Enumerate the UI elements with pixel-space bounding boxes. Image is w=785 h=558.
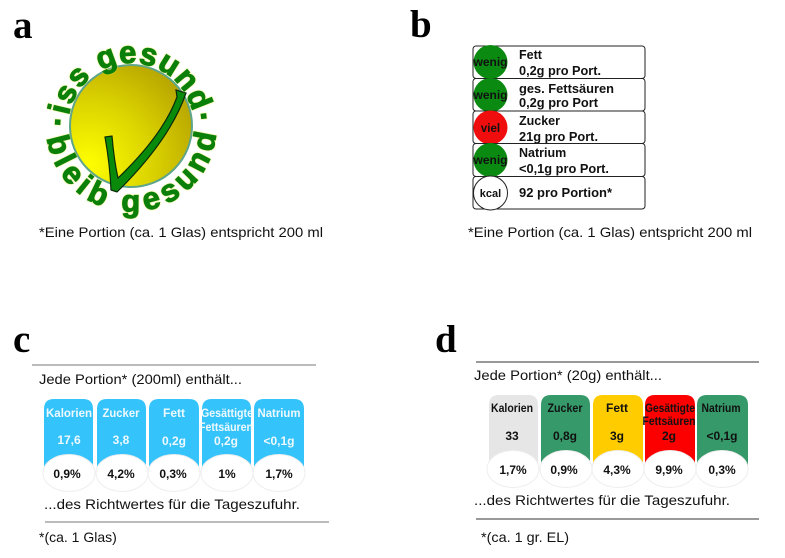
tab: Natrium: 0,3% — [708, 463, 736, 477]
tab: Natrium — [696, 395, 748, 488]
caption d: ...des Richtwertes für die Tageszufuhr. — [474, 492, 730, 508]
tab: Gesättigte Fettsäuren: Fettsäuren — [199, 420, 253, 434]
tab: Zucker: 4,2% — [107, 467, 135, 481]
tab: Gesättigte Fettsäuren — [642, 395, 696, 488]
tab: Fett — [592, 395, 644, 488]
tab: Fett: 0,3% — [159, 467, 187, 481]
panel d: colored nutrition tabs — [435, 318, 759, 545]
tab: Kalorien — [43, 399, 95, 492]
panel c: blue nutrition tabs — [13, 318, 329, 545]
tab: Fett: Fett — [606, 401, 628, 415]
icon: yellow circle — [70, 65, 192, 187]
tab: Kalorien: 17,6 — [57, 433, 81, 447]
tab: Kalorien — [487, 395, 539, 488]
row: Natrium — [472, 143, 645, 177]
panel letter a: a — [13, 4, 32, 47]
panel letter b: b — [410, 3, 432, 46]
row: kcal: kcal — [480, 188, 501, 200]
row: gesättigte Fettsäuren: ges. Fettsäuren — [519, 82, 614, 96]
row: kcal: 92 pro Portion* — [519, 186, 612, 200]
tab: Fett — [148, 399, 200, 492]
tab: Fett: 0,2g — [162, 434, 186, 448]
footnote c: *(ca. 1 Glas) — [39, 529, 117, 545]
tab: Fett: 3g — [610, 429, 624, 443]
tab: Gesättigte Fettsäuren — [199, 399, 253, 492]
row: gesättigte Fettsäuren — [472, 78, 645, 112]
tab: Natrium: Natrium — [702, 401, 740, 415]
tab: Zucker — [96, 399, 148, 492]
tab: Zucker: Zucker — [102, 406, 140, 420]
logo ring text top: ·iss gesund· — [46, 44, 214, 126]
row: Natrium: Natrium — [519, 146, 566, 160]
row: Fett: Fett — [519, 48, 543, 62]
tab: Gesättigte Fettsäuren: 9,9% — [655, 463, 683, 477]
tab: Kalorien: 0,9% — [53, 467, 81, 481]
row: Natrium: <0,1g pro Port. — [519, 162, 609, 176]
heading c: Jede Portion* (200ml) enthält... — [39, 371, 242, 387]
row: Zucker: viel — [481, 123, 500, 135]
tab: Gesättigte Fettsäuren: 2g — [662, 429, 676, 443]
tab: Kalorien: 1,7% — [499, 463, 527, 477]
row: Zucker: Zucker — [519, 114, 560, 128]
tab: Kalorien: 33 — [505, 429, 519, 443]
tab: Natrium — [253, 399, 305, 492]
tab: Zucker: 3,8 — [113, 433, 130, 447]
tab: Kalorien: Kalorien — [491, 401, 533, 415]
footnote b: *Eine Portion (ca. 1 Glas) entspricht 200 ml — [468, 224, 752, 240]
logo ring text bottom: bleib gesund — [46, 130, 218, 220]
tab: Gesättigte Fettsäuren: Fettsäuren — [642, 414, 696, 428]
row: gesättigte Fettsäuren: 0,2g pro Port — [519, 96, 599, 110]
panel letter c: c — [13, 318, 30, 361]
row: Zucker: 21g pro Port. — [519, 130, 598, 144]
row: Fett: 0,2g pro Port. — [519, 64, 601, 78]
row: gesättigte Fettsäuren: wenig — [472, 90, 508, 102]
icon: green check mark — [105, 90, 186, 192]
tab: Zucker — [540, 395, 592, 488]
row: Fett — [472, 45, 645, 79]
tab: Fett: Fett — [163, 406, 185, 420]
tab: Natrium: <0,1g — [263, 434, 295, 448]
row: Natrium: wenig — [472, 155, 508, 167]
footnote a: *Eine Portion (ca. 1 Glas) entspricht 200 ml — [39, 224, 323, 240]
tab: Zucker: 0,9% — [550, 463, 578, 477]
tab: Gesättigte Fettsäuren: Gesättigte — [645, 401, 695, 415]
tab: Natrium: <0,1g — [706, 429, 738, 443]
footnote d: *(ca. 1 gr. EL) — [481, 529, 569, 545]
tab: Kalorien: Kalorien — [46, 406, 92, 420]
tab: Fett: 4,3% — [603, 463, 631, 477]
tab: Zucker: Zucker — [548, 401, 583, 415]
tab: Natrium: Natrium — [258, 406, 300, 420]
tab: Gesättigte Fettsäuren: 1% — [218, 467, 236, 481]
row: kcal — [473, 176, 645, 210]
row: Fett: wenig — [472, 57, 508, 69]
panel a: health logo — [13, 4, 323, 240]
panel letter d: d — [435, 318, 457, 361]
caption c: ...des Richtwertes für die Tageszufuhr. — [44, 496, 300, 512]
tab: Natrium: 1,7% — [265, 467, 293, 481]
panel b: traffic light rows — [410, 3, 752, 240]
heading d: Jede Portion* (20g) enthält... — [474, 367, 662, 383]
row: Zucker — [473, 110, 645, 144]
tab: Gesättigte Fettsäuren: 0,2g — [214, 434, 238, 448]
tab: Zucker: 0,8g — [553, 429, 577, 443]
tab: Gesättigte Fettsäuren: Gesättigte — [201, 406, 253, 420]
